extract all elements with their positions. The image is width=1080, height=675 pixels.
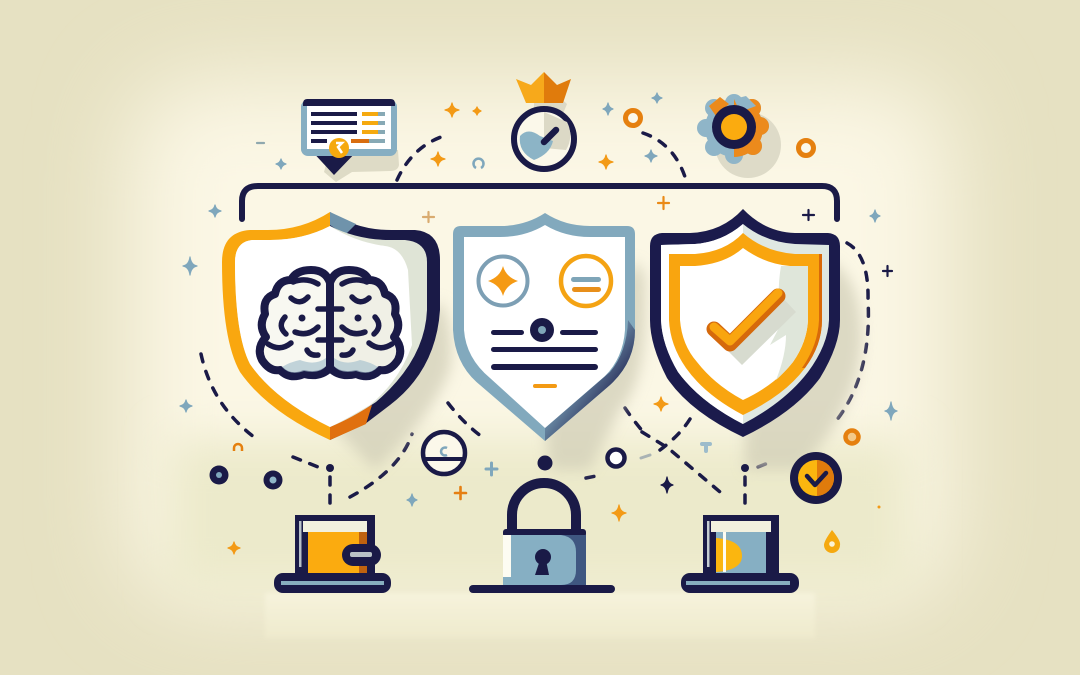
- brain icon: [260, 270, 400, 376]
- icon: coin device: [681, 515, 799, 593]
- icon: document speech bubble: [301, 99, 399, 182]
- icon: check badge: [790, 452, 842, 504]
- check mark: [714, 293, 778, 344]
- icon: wallet device: [274, 515, 391, 593]
- connector bracket: [242, 186, 837, 219]
- decorative sparkles: [180, 93, 897, 554]
- icon: padlock: [469, 483, 615, 593]
- small rings and dots: [210, 110, 880, 508]
- icon: gauge circle: [423, 432, 465, 474]
- shield: document: [453, 213, 635, 441]
- icon: orange drop: [824, 530, 840, 553]
- text lines: [491, 318, 598, 388]
- lines badge: [561, 256, 611, 306]
- shield: brain: [222, 212, 440, 440]
- dashed connector lines: [201, 133, 868, 510]
- shield: check mark: [650, 209, 840, 437]
- shield shadows: [335, 260, 862, 470]
- icon: crown and clock: [514, 72, 574, 169]
- icon: gear: [697, 94, 781, 178]
- star badge: [478, 256, 528, 306]
